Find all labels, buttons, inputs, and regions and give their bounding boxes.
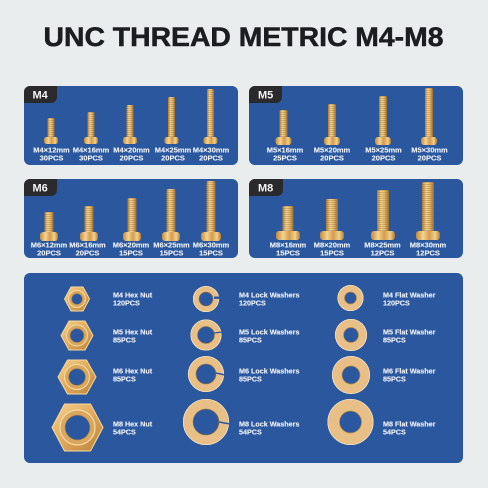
bolt: M6x25 [162,189,180,241]
bolt: M5x16 [276,110,292,145]
bolt: M5x30 [421,88,437,145]
text: M8 flat washer: M8 Flat Washer [383,420,436,428]
bolt: M6x16 [80,206,98,241]
icon: M4 flat washer [338,285,364,311]
badge: M8: M8 [258,182,273,194]
icon: M4 hex nut [64,287,90,311]
labels: M8 sizes: M8×30mm [410,240,447,250]
labels: M6 sizes: 20PCS [76,248,99,258]
labels: M5 sizes: M5×20mm [314,146,351,154]
labels: M8 sizes: 15PCS [276,248,300,258]
labels: M4 sizes: M4×25mm [155,146,192,154]
bolt: M8x20 [320,199,344,240]
text: M4 hex nut: M4 Hex Nut [113,290,153,300]
labels: M5 sizes: 25PCS [273,154,297,162]
icon: M6 lock washer [188,356,225,392]
text: M4 flat washer: 120PCS [383,298,410,308]
icon: M5 lock washer [191,320,222,350]
panel: M4 bolts [24,86,238,165]
badge: M4: M4 [32,90,49,102]
panel: M6 bolts [24,179,238,258]
badge: M8 [249,179,283,196]
bolt: M6x12 [40,212,58,241]
text: M5 lock washers: M5 Lock Washers [239,328,299,336]
bolt: M4x30 [204,89,218,144]
labels: M8 sizes: M8×20mm [314,240,351,250]
text: M6 lock washers: M6 Lock Washers [239,366,299,376]
labels: M4 sizes: 20PCS [199,154,223,162]
labels: M6 sizes: M6×30mm [193,240,230,250]
labels: M4 sizes: M4×16mm [73,146,110,154]
bolt: M5x20 [324,104,340,145]
text: M5 flat washer [383,328,436,344]
labels: M4 sizes: M4×12mm [33,146,70,154]
bolt: M6x20 [123,198,141,241]
icon: M8 hex nut [52,404,103,451]
labels: M5 sizes: M5×25mm [365,146,402,154]
labels: M4 sizes: M4×30mm [193,146,230,154]
icon: M6 flat washer [332,356,370,394]
labels: M5 sizes: 20PCS [418,154,441,162]
labels: M4 sizes: 30PCS [40,154,63,162]
text: M8 lock washers: M8 Lock Washers [239,420,299,428]
badge: M6 [24,179,57,196]
panel: M8 bolts [249,179,463,258]
labels: M5 sizes: 20PCS [372,154,395,162]
bolt: M4x20 [123,105,137,144]
title: UNC THREAD METRIC M4-M8 [44,22,444,52]
text: M8 flat washer [383,420,436,436]
text: M6 lock washers [239,366,299,384]
text: M6 hex nut: 85PCS [113,374,136,384]
bolt: M6x30 [201,181,221,241]
text: M5 flat washer: M5 Flat Washer [383,328,436,336]
text: M6 hex nut: M6 Hex Nut [113,366,153,376]
labels: M6 sizes [31,240,230,258]
icon: M8 flat washer [328,399,374,445]
text: M6 flat washer: M6 Flat Washer [383,366,436,376]
icon: M6 hex nut [58,360,96,394]
labels: M4 sizes: M4×20mm [113,146,150,154]
labels: M5 sizes: M5×16mm [267,146,304,154]
labels: M8 sizes [270,240,447,258]
text: M8 hex nut: M8 Hex Nut [113,420,153,428]
text: M8 hex nut [113,420,153,436]
icon: M4 lock washer [193,286,220,312]
labels: M8 sizes: 12PCS [371,248,394,258]
labels: M6 sizes: M6×25mm [153,240,190,250]
labels: M8 sizes: 15PCS [320,248,344,258]
badge: M5: M5 [258,90,273,102]
text: M8 hex nut: 54PCS [113,428,136,436]
text: M6 flat washer: 85PCS [383,374,406,384]
labels: M5 sizes [267,146,448,162]
bolt: M4x16 [84,112,98,144]
text: M4 hex nut [113,290,153,308]
bolt: M8x30 [416,182,440,240]
labels: M6 sizes: 15PCS [160,248,183,258]
text: M4 lock washers [239,290,299,308]
bolt: M5x25 [375,96,391,145]
text: M8 lock washers [239,420,299,436]
text: M4 hex nut: 120PCS [113,298,140,308]
labels: M8 sizes: M8×25mm [364,240,401,250]
text: M4 lock washers: 120PCS [239,298,266,308]
bolt: M8x25 [371,190,395,240]
labels: M4 sizes: 20PCS [120,154,143,162]
text: M6 hex nut [113,366,153,384]
text: M4 flat washer: M4 Flat Washer [383,290,436,300]
text: M5 lock washers [239,328,299,344]
badge: M6: M6 [32,182,48,194]
panel: nuts and washers [24,273,463,463]
badge: M4 [24,86,57,103]
text: M5 hex nut [113,328,153,344]
panel: M5 bolts [249,86,463,165]
text: M4 flat washer [383,290,436,308]
labels: M6 sizes: M6×20mm [113,240,150,250]
labels: M6 sizes: M6×16mm [69,240,106,250]
labels: M6 sizes: M6×12mm [31,240,68,250]
labels: M6 sizes: 15PCS [199,248,223,258]
icon: M5 flat washer [335,319,367,351]
bolt: M8x16 [276,206,300,240]
text: M4 lock washers: M4 Lock Washers [239,290,299,300]
text: M5 lock washers: 85PCS [239,336,262,344]
bolt: M4x12 [44,118,58,144]
icon: M8 lock washer [183,399,230,445]
badge: M5 [249,86,282,103]
labels: M8 sizes: M8×16mm [270,240,307,250]
labels: M4 sizes: 30PCS [79,154,103,162]
labels: M6 sizes: 20PCS [37,248,61,258]
labels: M6 sizes: 15PCS [119,248,143,258]
bolt: M4x25 [164,97,178,144]
text: M6 lock washers: 85PCS [239,374,262,384]
labels: M4 sizes: 20PCS [161,154,185,162]
text: M8 flat washer: 54PCS [383,428,406,436]
icon: M5 hex nut [61,321,93,350]
labels: M4 sizes [33,146,230,162]
text: M5 hex nut: 85PCS [113,336,136,344]
text: M5 hex nut: M5 Hex Nut [113,328,153,336]
text: M8 lock washers: 54PCS [239,428,262,436]
labels: M5 sizes: 20PCS [320,154,344,162]
labels: M8 sizes: 12PCS [416,248,440,258]
labels: M5 sizes: M5×30mm [411,146,448,154]
text: M6 flat washer [383,366,436,384]
text: M5 flat washer: 85PCS [383,336,406,344]
